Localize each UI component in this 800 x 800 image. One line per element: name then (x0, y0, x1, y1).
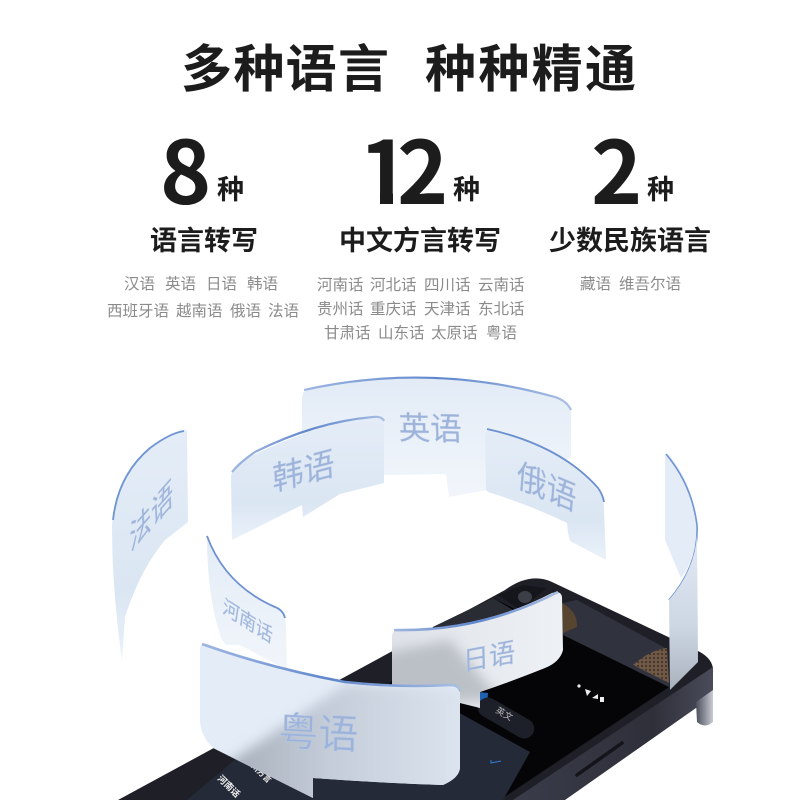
card: russian (485, 429, 606, 560)
list: dialects: 重庆话 (370, 300, 417, 318)
stat: 2 (591, 104, 674, 230)
heading: minority languages: 少数民族语言 (549, 226, 711, 256)
status icons (577, 684, 604, 702)
list: dialects: 山东话 (378, 324, 425, 342)
list: languages: 西班牙语 (107, 302, 169, 320)
card: english: 英语 (398, 410, 463, 447)
blue indicator (478, 692, 488, 708)
list: minority languages: 维吾尔语 (619, 275, 681, 293)
device side face (513, 667, 713, 800)
side button slot (577, 743, 622, 775)
list: dialects (317, 276, 525, 342)
card: henan (207, 535, 287, 670)
list: dialects: 太原话 (431, 324, 478, 342)
card: french: 法语 (129, 473, 174, 559)
list: dialects: 甘肃话 (324, 324, 371, 342)
list: dialects: 粤语 (486, 323, 517, 342)
list: dialects: 东北话 (478, 300, 525, 318)
title (181, 41, 636, 98)
list: languages: 俄语 (230, 302, 261, 320)
card: english (302, 377, 571, 497)
speaker grille small (562, 603, 577, 633)
stat: 8: 种 (217, 175, 244, 205)
camera recess (498, 585, 547, 610)
card: japanese (392, 590, 563, 708)
card: korean (231, 417, 384, 540)
card: cantonese: 粤语 (278, 710, 359, 758)
card: right side (665, 454, 698, 690)
list: dialects: 云南话 (478, 276, 525, 294)
device body (118, 578, 713, 800)
left top panel (433, 598, 513, 630)
top speaker bay (563, 600, 669, 687)
card: henan: 河南话 (221, 595, 274, 648)
language chip: 英文 (494, 704, 515, 723)
panel: 12 dialects (318, 138, 524, 340)
list: dialects: 四川话 (424, 276, 471, 294)
list: languages: 韩语 (247, 275, 278, 293)
panel: 8 languages (107, 104, 299, 320)
list: dialects: 河北话 (370, 276, 417, 294)
list: minority languages (580, 275, 681, 293)
speaker grille (633, 648, 669, 683)
stat: 12: 1 (359, 104, 410, 230)
device screen (300, 598, 669, 800)
stat: 2: 2 (591, 104, 642, 230)
list: languages: 汉语 (124, 275, 155, 293)
list: languages (107, 275, 299, 320)
device foot (696, 690, 713, 726)
list: dialects: 天津话 (424, 300, 471, 318)
stat: 12 (368, 138, 479, 204)
card: french (112, 430, 188, 660)
heading: language transcription: 语言转写 (150, 226, 258, 256)
list: dialects: 贵州话 (317, 300, 364, 318)
list: minority languages: 藏语 (580, 275, 611, 293)
stat: 8 (160, 104, 244, 230)
screen label: dialect: 河南话 (216, 773, 243, 799)
list: languages: 英语 (165, 275, 196, 293)
list: languages: 越南语 (176, 302, 223, 320)
list: languages: 法语 (268, 302, 299, 320)
device: translator (118, 578, 713, 800)
language chip (474, 694, 538, 742)
card: russian: 俄语 (515, 456, 578, 518)
stat: 2: 种 (647, 175, 674, 205)
stat: 12: 2 (397, 104, 448, 230)
list: dialects: 河南话 (317, 276, 364, 294)
stat: 12: 种 (453, 175, 480, 205)
title: 种种精通 (425, 41, 636, 98)
heading: dialect transcription: 中文方言转写 (339, 225, 501, 256)
title: 多种语言 (181, 41, 389, 98)
panel: 2 minority languages (549, 104, 711, 293)
blue tick (491, 760, 501, 763)
card: cantonese (200, 642, 461, 798)
card: japanese: 日语 (463, 637, 515, 677)
stat: 8: 8 (160, 104, 211, 230)
screen label: dialect 2: 四川方言 (244, 755, 274, 785)
navy screen panel (187, 680, 530, 800)
list: languages: 日语 (206, 275, 237, 293)
card: korean: 韩语 (272, 445, 335, 498)
